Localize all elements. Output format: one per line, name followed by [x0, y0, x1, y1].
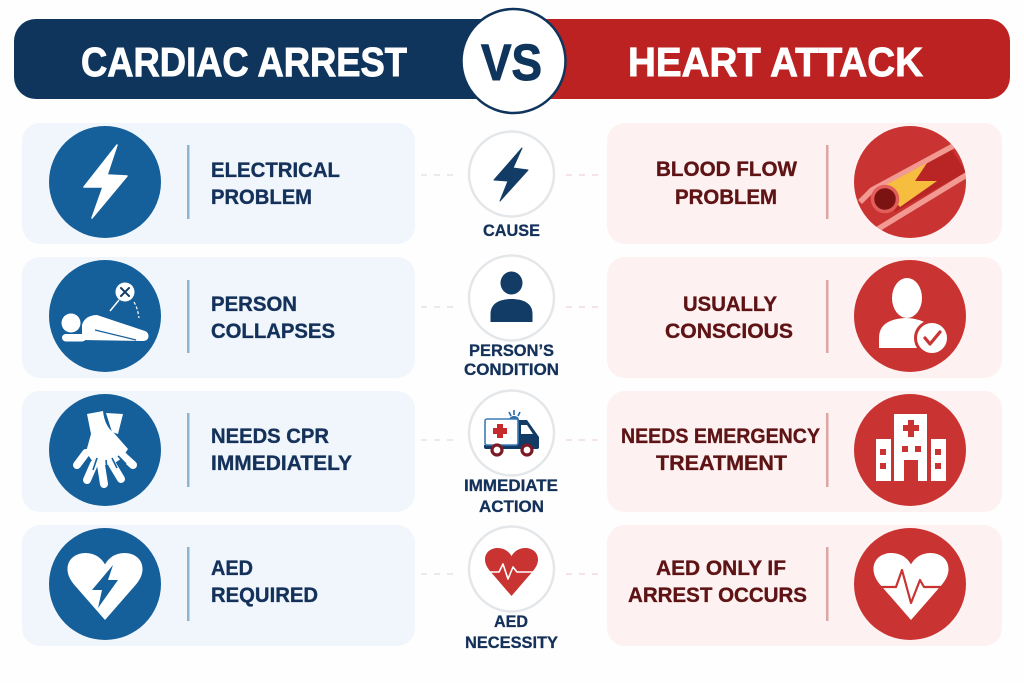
- text: needs CPR immediately: [211, 424, 352, 475]
- text: AED only if arrest occurs: [628, 556, 807, 607]
- label: person's condition: CONDITION: [464, 360, 559, 379]
- text: usually conscious: CONSCIOUS: [665, 319, 793, 343]
- label: AED necessity: NECESSITY: [465, 633, 559, 652]
- icon: collapsed person: [49, 260, 161, 372]
- icon: navy bolt: [494, 148, 528, 201]
- text: AED only if arrest occurs: ARREST OCCURS: [628, 583, 807, 607]
- text: electrical problem: ELECTRICAL: [211, 158, 340, 182]
- icon: CPR hands: [49, 394, 161, 506]
- text: AED only if arrest occurs: AED ONLY IF: [656, 556, 786, 580]
- text: AED required: [211, 556, 318, 607]
- row 4: center AED necessity: [421, 526, 602, 652]
- row 1: right card: [607, 123, 1002, 244]
- text: AED required: AED: [211, 556, 253, 580]
- text: usually conscious: USUALLY: [683, 292, 777, 316]
- text: AED required: REQUIRED: [211, 583, 318, 607]
- row 4: right card: [607, 525, 1002, 646]
- text: blood flow problem: PROBLEM: [675, 185, 777, 209]
- header: heart attack banner: [510, 19, 1010, 99]
- VS badge: VS: [481, 34, 542, 91]
- row 1: center cause: [421, 132, 602, 240]
- icon: AED heart with bolt: [49, 528, 161, 640]
- row 3: right card: [607, 391, 1002, 512]
- row 2: left card: [22, 257, 415, 378]
- label: cause: CAUSE: [483, 221, 540, 240]
- text: needs emergency treatment: [621, 424, 820, 475]
- icon: ambulance: [484, 410, 539, 455]
- header: cardiac arrest banner: [14, 19, 520, 99]
- label: person's condition: [464, 341, 559, 379]
- label: immediate action: IMMEDIATE: [464, 476, 558, 495]
- icon: hospital: [854, 394, 966, 506]
- row 2: center condition: [421, 256, 602, 379]
- row 4: left card: [22, 525, 415, 646]
- icon: conscious person with check: [854, 260, 966, 372]
- label: AED necessity: AED: [494, 612, 528, 631]
- label: immediate action: ACTION: [479, 497, 544, 516]
- text: person collapses: COLLAPSES: [211, 319, 335, 343]
- title: heart attack: HEART ATTACK: [628, 39, 923, 85]
- title: cardiac arrest: CARDIAC ARREST: [81, 39, 407, 85]
- icon: lightning bolt: [49, 126, 161, 238]
- row 1: left card: [22, 123, 415, 244]
- text: electrical problem: PROBLEM: [211, 185, 312, 209]
- text: electrical problem: [211, 158, 340, 209]
- VS badge: [462, 9, 566, 113]
- label: AED necessity: [465, 612, 559, 652]
- text: usually conscious: [665, 292, 793, 343]
- icon: person: [490, 272, 532, 322]
- label: immediate action: [464, 476, 558, 516]
- row 3: left card: [22, 391, 415, 512]
- icon: red heart with pulse: [485, 548, 538, 596]
- text: person collapses: [211, 292, 335, 343]
- text: person collapses: PERSON: [211, 292, 297, 316]
- label: person's condition: PERSON’S: [469, 341, 554, 360]
- text: needs emergency treatment: TREATMENT: [656, 451, 787, 475]
- icon: blocked artery: [854, 126, 968, 238]
- text: needs emergency treatment: NEEDS EMERGENCY: [621, 424, 820, 448]
- icon: white heart with pulse: [854, 528, 966, 640]
- row 3: center action: [421, 390, 602, 516]
- text: needs CPR immediately: NEEDS CPR: [211, 424, 329, 448]
- text: blood flow problem: BLOOD FLOW: [656, 157, 798, 181]
- row 2: right card: [607, 257, 1002, 378]
- text: blood flow problem: [656, 157, 798, 209]
- text: needs CPR immediately: IMMEDIATELY: [211, 451, 352, 475]
